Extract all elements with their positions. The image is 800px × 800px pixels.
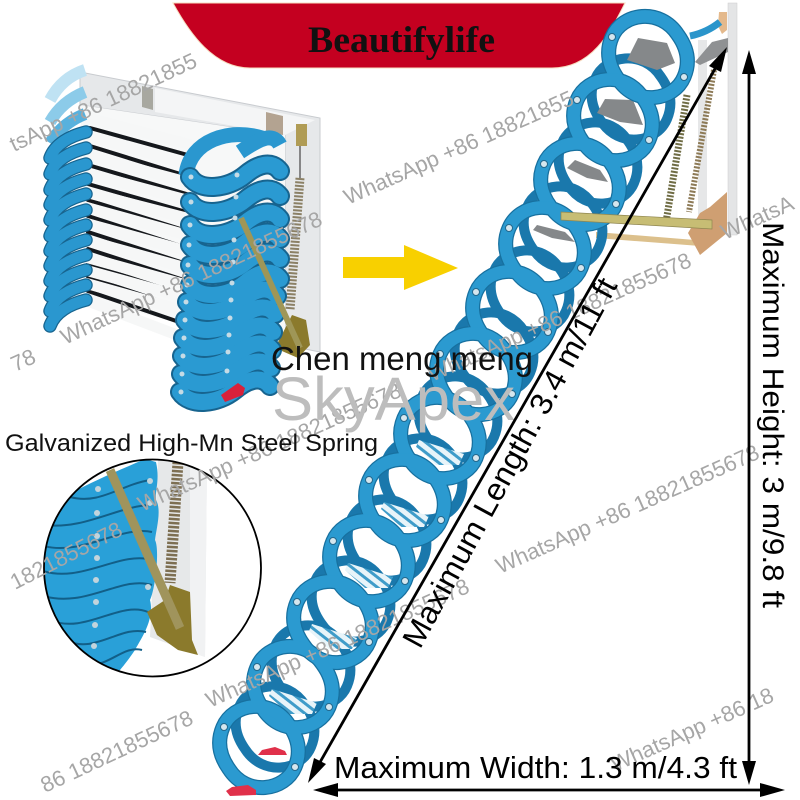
- watermarks: WhatsApp +86 18821855678: [202, 574, 473, 713]
- watermarks: tsApp +86 18821855: [6, 48, 201, 157]
- arrow: maximum height: [742, 50, 756, 785]
- arrow: maximum length: [308, 47, 727, 783]
- detail circle: spring close-up: [20, 459, 261, 680]
- yellow arrow: [343, 245, 458, 290]
- striped lower steps: [269, 440, 464, 714]
- blue right rail: [178, 135, 280, 402]
- text: SkyApex: SkyApex: [272, 365, 515, 433]
- wall frame: [80, 72, 320, 352]
- arrow: maximum width: [313, 783, 785, 797]
- grey upper steps: [533, 38, 675, 242]
- back rails: [236, 58, 670, 768]
- label: maximum width: Maximum Width: 1.3 m/4.3 ft: [334, 750, 737, 785]
- folded ladder product image: [50, 70, 320, 402]
- spring and bracket: [275, 124, 310, 358]
- text: spring caption: Galvanized High-Mn Steel Spring: [5, 430, 378, 457]
- label: maximum height: Maximum Height: 3 m/9.8 ft: [756, 222, 789, 608]
- extended ladder: [220, 3, 737, 796]
- red banner with title: [173, 3, 625, 68]
- frame hinges: [142, 86, 153, 110]
- stair treads: [85, 117, 195, 338]
- upper support arm: [561, 212, 712, 229]
- watermarks: WhatsApp +86 18821855678: [492, 440, 763, 579]
- watermarks: WhatsA: [717, 190, 798, 245]
- rivets: [220, 34, 688, 770]
- text: Chen meng meng: Chen meng meng: [271, 340, 533, 377]
- watermarks: WhatsApp +86 18821855678: [134, 378, 405, 517]
- watermarks: WhatsApp +86 18821855678: [57, 206, 326, 350]
- watermarks: 86 18821855678: [37, 705, 197, 798]
- blue left rail: [50, 70, 86, 326]
- title: Beautifylife: [308, 20, 495, 61]
- wall hardware: [596, 3, 737, 255]
- red foot pedal: [221, 383, 245, 402]
- front rails: [220, 16, 687, 788]
- red foot pedals: [226, 747, 287, 796]
- watermarks: 78: [7, 344, 39, 377]
- watermarks: 1821855678: [6, 517, 126, 594]
- watermarks: WhatsApp +86 18821855: [340, 85, 577, 210]
- watermarks: WhatsApp +86 18821855678: [424, 248, 695, 387]
- label: maximum length: Maximum Length: 3.4 m/11 ft: [395, 272, 624, 653]
- watermarks: WhatsApp +86 18: [607, 682, 777, 777]
- support arm: [241, 218, 300, 348]
